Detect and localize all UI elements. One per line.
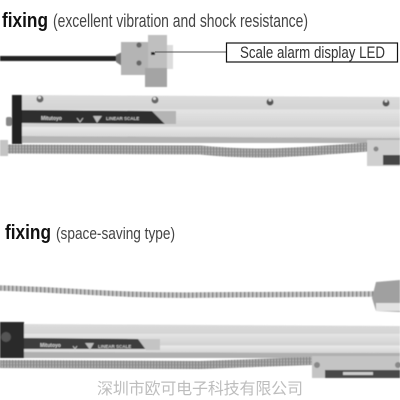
heading: second fixing type [5,222,175,244]
lower scale body [24,324,400,353]
heading: first fixing type [2,10,308,32]
upper scale body [22,95,400,138]
upper dark label band [22,110,165,124]
lower reading head [312,356,400,378]
upper flexible cable [8,147,368,153]
lower flexible tube with connector [0,280,400,312]
upper linear scale [0,95,400,166]
upper reading head [367,140,400,166]
heading: first fixing type: (excellent vibration and shock resistance) [53,11,308,31]
watermark: company name: 深圳市欧可电子科技有限公司 [97,380,303,398]
upper scale end block [12,95,22,144]
lower linear scale [0,322,400,378]
heading: second fixing type: (space-saving type) [56,225,175,243]
upper linear scale: Mitutoyo [41,116,62,122]
lower scale end block [0,322,24,358]
lower dark label band [24,338,146,349]
connector with cable, upper scale [0,35,173,87]
upper linear scale: LINEAR SCALE [106,116,139,121]
lower connector [372,280,400,312]
lower flexible cable [0,361,312,365]
upper mounting screws [36,96,390,106]
heading: first fixing type: fixing [2,10,48,32]
lower linear scale: LINEAR SCALE [98,344,131,349]
leader line to LED [155,51,226,53]
heading: second fixing type: fixing [5,222,51,244]
lower linear scale: Mitutoyo [40,343,61,349]
